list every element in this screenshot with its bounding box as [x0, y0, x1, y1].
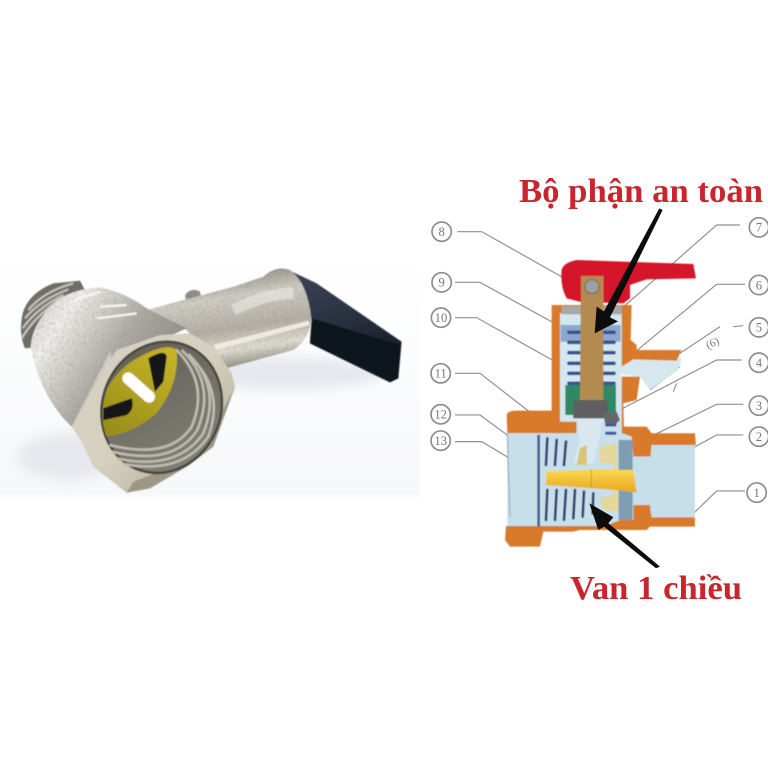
- panel: cutaway diagram: [431, 208, 768, 568]
- male thread: [21, 281, 87, 348]
- arrow: safety part: [595, 208, 663, 333]
- photo backdrop: [0, 255, 420, 500]
- label: safety part: Bộ phận an toàn: [519, 173, 763, 210]
- part numbers: 3: [756, 399, 762, 413]
- label: check valve: Van 1 chiều: [570, 570, 742, 607]
- panel: product photo: [0, 255, 420, 500]
- red lever: [561, 260, 696, 303]
- arrow: check valve: [589, 503, 660, 568]
- stem: [580, 276, 603, 400]
- barrel: [147, 268, 312, 370]
- inner spring small: [607, 425, 615, 433]
- part numbers: 7: [756, 221, 762, 235]
- part numbers: 10: [435, 311, 447, 325]
- valve section: [505, 260, 696, 547]
- part numbers: 8: [439, 225, 445, 239]
- yellow disc: [102, 347, 177, 437]
- body: [31, 287, 187, 427]
- bore: [82, 323, 242, 491]
- white pin: [128, 378, 149, 397]
- green seal: [565, 385, 616, 415]
- inlet cap: [537, 435, 540, 527]
- bore: [507, 422, 695, 526]
- callout lines: [455, 225, 745, 523]
- part numbers: 9: [439, 276, 445, 290]
- check valve spring: [546, 438, 593, 520]
- part numbers: (6): [704, 335, 722, 352]
- internal thread: [109, 349, 214, 466]
- outlet water: [617, 358, 682, 390]
- part numbers: 11: [435, 367, 447, 381]
- part numbers: 12: [434, 408, 447, 422]
- valve: [17, 268, 402, 493]
- grey cap: [562, 306, 622, 314]
- part numbers: [431, 218, 768, 502]
- stem foot: [573, 400, 608, 418]
- handle: [290, 271, 402, 382]
- part numbers: 5: [756, 321, 762, 335]
- part numbers: 6: [756, 278, 762, 292]
- brass spindle: [546, 469, 637, 493]
- spring retainer: [561, 325, 621, 342]
- part numbers: 1: [753, 486, 760, 500]
- part numbers: 4: [756, 356, 763, 370]
- stem chamber: [560, 313, 622, 422]
- hex nut: [72, 333, 235, 493]
- spring coils: [569, 332, 614, 383]
- check valve seat: [619, 440, 633, 520]
- orange housing: [552, 305, 682, 423]
- part numbers: 13: [434, 434, 447, 448]
- part numbers: 2: [756, 430, 762, 444]
